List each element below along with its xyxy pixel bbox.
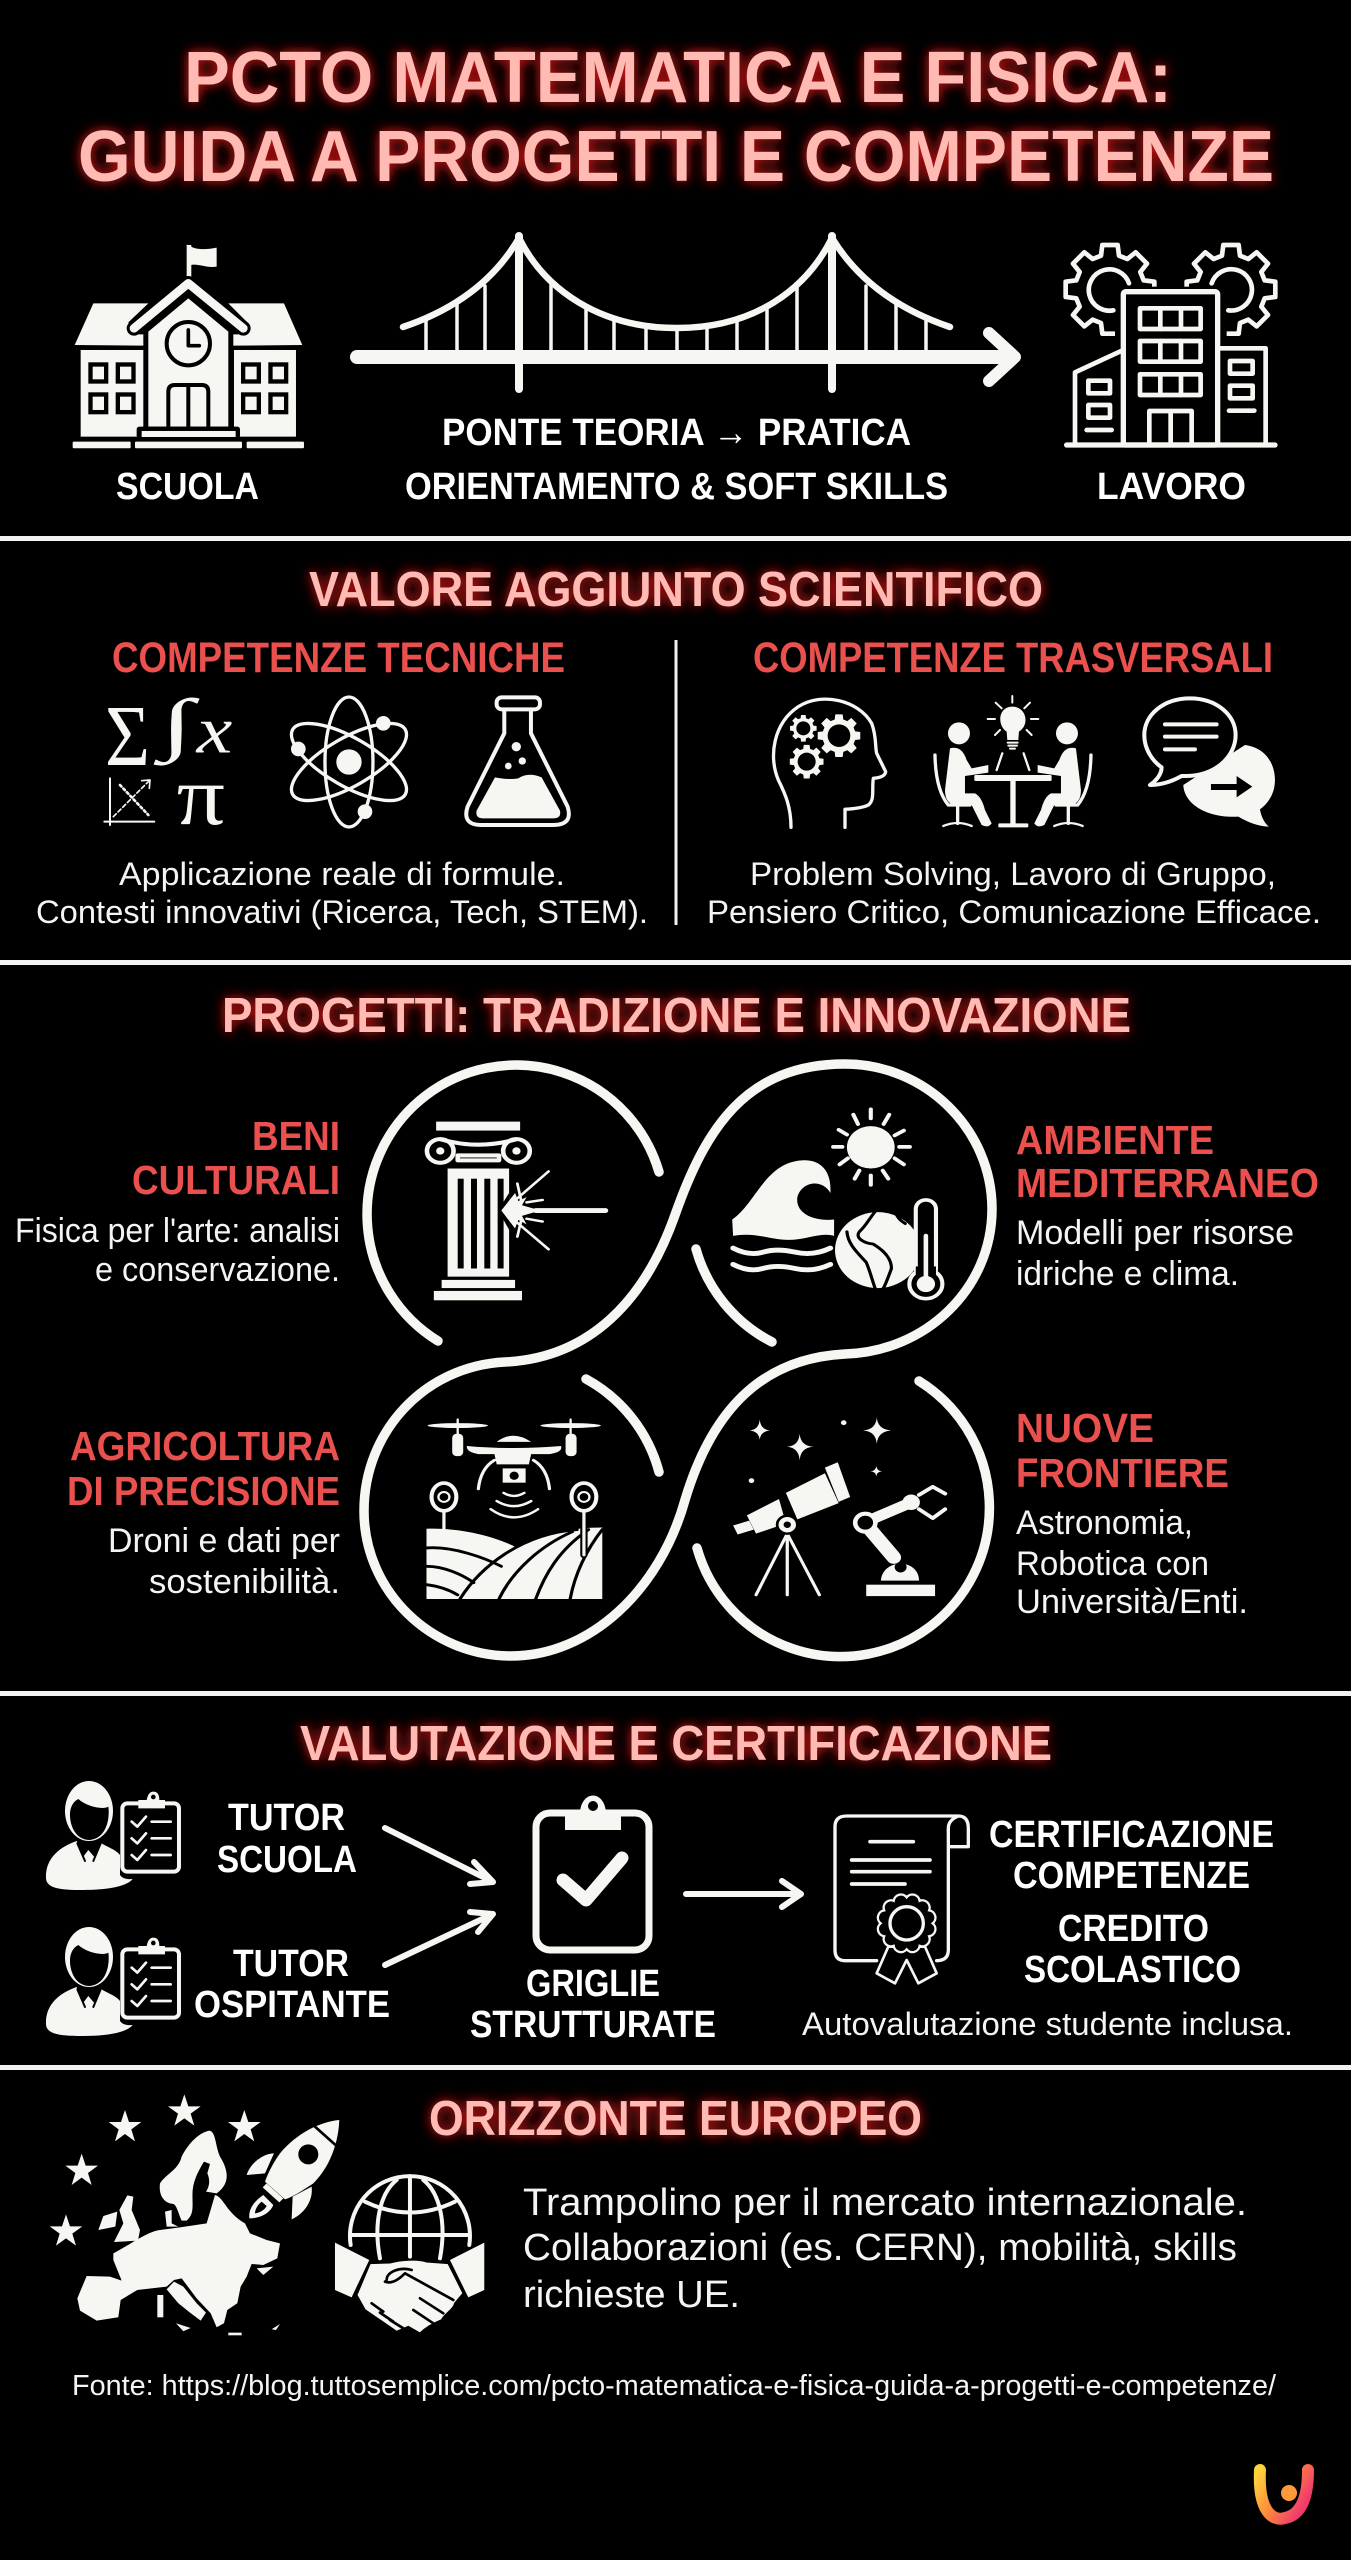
- panel: school to work bridge: [73, 236, 1275, 508]
- label: tutor ospitante: TUTOR: [233, 1943, 349, 1985]
- text: beni culturali: Fisica per l'arte: analisi: [15, 1212, 340, 1250]
- icon: globe and handshake: [335, 2176, 484, 2333]
- text: agricoltura di precisione: Droni e dati per: [108, 1522, 340, 1560]
- label: tutor scuola: [217, 1797, 357, 1881]
- icon: clipboard with check: [536, 1796, 649, 1950]
- text: beni culturali: BENI: [252, 1113, 340, 1159]
- arrow: tutor ospitante to griglie: [385, 1912, 493, 1965]
- panel: progetti: [15, 989, 1319, 1657]
- icon: rocket: [247, 2120, 339, 2219]
- label: scuola: SCUOLA: [116, 466, 259, 508]
- text: competenze tecniche: [36, 856, 648, 930]
- icon: certificate with rosette: [835, 1816, 968, 1983]
- icon: office building with gears: [1066, 245, 1275, 447]
- title: [78, 38, 1274, 197]
- icon: suspension bridge arrow: [357, 236, 1015, 389]
- label: lavoro: LAVORO: [1097, 466, 1246, 508]
- label: griglie strutturate: GRIGLIE: [526, 1963, 660, 2005]
- icon: wave, sun, earth and thermometer: [732, 1109, 942, 1299]
- arrow: tutor scuola to griglie: [385, 1828, 493, 1884]
- text: bridge caption: [405, 412, 948, 508]
- icon: math formulas: ∫: [153, 685, 200, 766]
- text: nuove frontiere: FRONTIERE: [1016, 1450, 1229, 1496]
- icon: atom: [281, 697, 417, 827]
- arrow: griglie to certificate: [686, 1881, 801, 1907]
- text: competenze trasversali: Pensiero Critico, Comunicazione Efficace.: [707, 894, 1321, 930]
- text: beni culturali: [15, 1113, 340, 1289]
- icon: team with light bulb: [935, 696, 1091, 827]
- panel: valore aggiunto scientifico: [36, 563, 1321, 930]
- text: credito scolastico: CREDITO: [1058, 1908, 1209, 1950]
- icon: map of europe with stars: [50, 2094, 280, 2335]
- text: orizzonte europeo description: richieste UE.: [523, 2274, 740, 2316]
- text: agricoltura di precisione: AGRICOLTURA: [70, 1423, 340, 1469]
- heading: VALUTAZIONE E CERTIFICAZIONE: [300, 1717, 1052, 1771]
- text: competenze tecniche: Contesti innovativi (Ricerca, Tech, STEM).: [36, 894, 648, 930]
- panel: valutazione e certificazione: [46, 1717, 1293, 2046]
- icon: drone over fields: [426, 1419, 602, 1599]
- text: certificazione competenze: COMPETENZE: [1013, 1855, 1250, 1897]
- text: agricoltura di precisione: DI PRECISIONE: [67, 1468, 340, 1514]
- icon: flask: [466, 697, 569, 825]
- text: credito scolastico: [1024, 1908, 1241, 1991]
- text: orizzonte europeo description: Collaborazioni (es. CERN), mobilità, skills: [523, 2227, 1237, 2269]
- icon: school: [73, 244, 304, 448]
- text: agricoltura di precisione: [67, 1423, 340, 1601]
- label: tutor ospitante: OSPITANTE: [194, 1984, 390, 2026]
- icon: tutor scuola: [46, 1781, 179, 1890]
- label: griglie strutturate: [470, 1963, 716, 2046]
- text: ambiente mediterraneo: Modelli per risorse: [1016, 1214, 1294, 1252]
- icon: ionic column with laser: [427, 1122, 605, 1300]
- text: beni culturali: CULTURALI: [132, 1157, 340, 1203]
- text: competenze trasversali: [707, 856, 1321, 930]
- text: ambiente mediterraneo: [1016, 1117, 1319, 1293]
- text: competenze tecniche: Applicazione reale di formule.: [119, 856, 565, 892]
- text: orizzonte europeo description: [523, 2182, 1247, 2316]
- label: tutor scuola: TUTOR: [228, 1797, 345, 1839]
- text: certificazione competenze: CERTIFICAZIONE: [989, 1814, 1274, 1856]
- text: nuove frontiere: [1016, 1405, 1248, 1621]
- icon: math formulas: [104, 685, 233, 843]
- text: beni culturali: e conservazione.: [95, 1251, 340, 1289]
- label: tutor ospitante: [194, 1943, 390, 2026]
- diagram: interlaced circular loops: [364, 1064, 992, 1657]
- text: bridge caption: PONTE TEORIA → PRATICA: [442, 412, 911, 454]
- text: certificazione competenze: [989, 1814, 1274, 1897]
- text: nuove frontiere: Università/Enti.: [1016, 1583, 1248, 1621]
- title: PCTO MATEMATICA E FISICA:: [184, 38, 1172, 118]
- text: agricoltura di precisione: sostenibilità.: [149, 1563, 340, 1601]
- icon: math formulas: x: [195, 695, 233, 768]
- text: ambiente mediterraneo: AMBIENTE: [1016, 1117, 1214, 1163]
- heading: PROGETTI: TRADIZIONE E INNOVAZIONE: [222, 989, 1131, 1043]
- text: credito scolastico: SCOLASTICO: [1024, 1949, 1241, 1991]
- heading: VALORE AGGIUNTO SCIENTIFICO: [309, 563, 1043, 617]
- title: GUIDA A PROGETTI E COMPETENZE: [78, 117, 1274, 197]
- icon: telescope and robot arm: [733, 1417, 945, 1596]
- source line: Fonte: https://blog.tuttosemplice.com/pcto-matematica-e-fisica-guida-a-progetti-e-competenze/: [72, 2370, 1277, 2402]
- panel: orizzonte europeo: [50, 2092, 1247, 2335]
- text: bridge caption: ORIENTAMENTO & SOFT SKILLS: [405, 466, 948, 508]
- text: ambiente mediterraneo: idriche e clima.: [1016, 1255, 1239, 1293]
- heading: ORIZZONTE EUROPEO: [429, 2092, 922, 2146]
- icon: tutor ospitante: [46, 1927, 179, 2036]
- label: griglie strutturate: STRUTTURATE: [470, 2004, 716, 2046]
- text: ambiente mediterraneo: MEDITERRANEO: [1016, 1160, 1319, 1206]
- text: competenze trasversali: Problem Solving, Lavoro di Gruppo,: [750, 856, 1276, 892]
- text: nuove frontiere: Astronomia,: [1016, 1504, 1193, 1542]
- logo: [1260, 2470, 1308, 2519]
- icon: head with gears: [774, 699, 886, 827]
- icon: math formulas: π: [177, 751, 225, 843]
- text: orizzonte europeo description: Trampolino per il mercato internazionale.: [523, 2182, 1247, 2224]
- text: nuove frontiere: NUOVE: [1016, 1405, 1154, 1451]
- icon: math formulas: Σ: [105, 687, 150, 784]
- label: tutor scuola: SCUOLA: [217, 1839, 357, 1881]
- icon: speech bubbles: [1144, 698, 1275, 827]
- text: nuove frontiere: Robotica con: [1016, 1545, 1209, 1583]
- subheading: competenze tecniche: COMPETENZE TECNICHE: [112, 634, 565, 682]
- subheading: competenze trasversali: COMPETENZE TRASVERSALI: [753, 634, 1273, 682]
- text: autovalutazione: Autovalutazione studente inclusa.: [802, 2006, 1293, 2042]
